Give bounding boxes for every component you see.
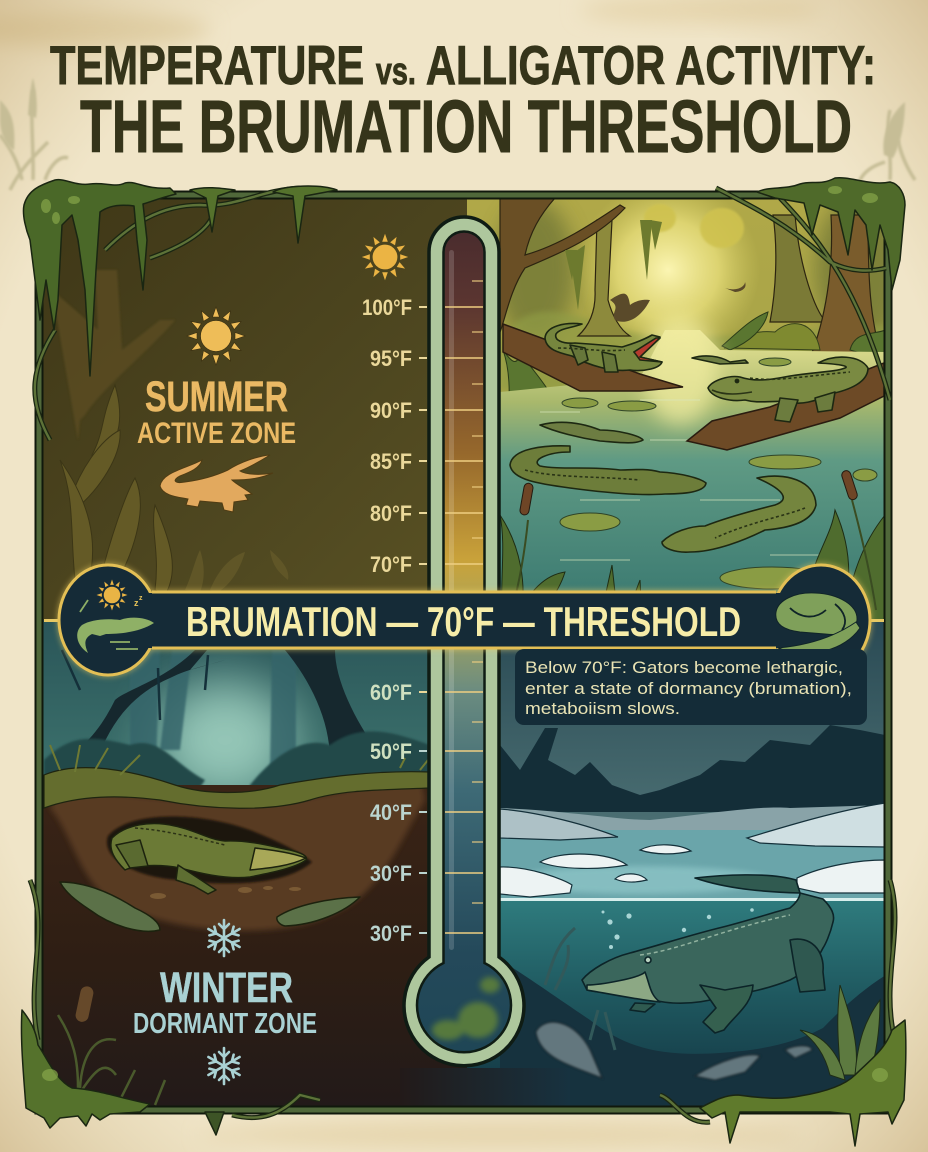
alligator: buried left bbox=[60, 882, 160, 931]
alligator: open jaw on log bbox=[545, 324, 662, 372]
scale ticks bbox=[445, 281, 483, 933]
moss: bottom right bbox=[700, 1020, 906, 1146]
grass ridge bbox=[44, 768, 430, 808]
snow bank back bbox=[500, 806, 867, 830]
logs bbox=[503, 324, 884, 450]
panel: winter scene right bbox=[400, 620, 887, 1110]
icon: sun with alligator: z bbox=[134, 598, 139, 608]
temperature labels: 40°F bbox=[370, 800, 412, 825]
moss: bottom left bbox=[21, 1010, 150, 1128]
river water bbox=[500, 330, 884, 593]
icon: sun bbox=[187, 307, 245, 365]
panel: winter forest left bbox=[44, 620, 428, 785]
thermometer bbox=[404, 217, 524, 1066]
alligator: long in water bbox=[510, 446, 706, 495]
temperature labels: 85°F bbox=[370, 449, 412, 474]
cattails bbox=[519, 469, 858, 516]
floor blend beneath thermometer bbox=[430, 1068, 526, 1106]
callout: below 70F: metaboiism slows. bbox=[525, 699, 680, 718]
heading: dormant zone: DORMANT ZONE bbox=[133, 1008, 317, 1040]
heading: active zone: ACTIVE ZONE bbox=[137, 417, 296, 450]
lily pads bbox=[560, 358, 877, 589]
surface water bbox=[500, 830, 886, 900]
banner text: BRUMATION — 70°F — THRESHOLD bbox=[186, 598, 741, 645]
bottom-left reeds bbox=[58, 1015, 165, 1105]
callout: below 70F: enter a state of dormancy (brumation), bbox=[525, 679, 852, 698]
panel: summer left bbox=[42, 198, 467, 623]
icon: sun with alligator bbox=[77, 580, 154, 653]
temperature labels: 30°F bbox=[370, 861, 412, 886]
alligator: burrow main bbox=[111, 823, 306, 894]
panel: burrow soil bbox=[42, 745, 467, 1110]
heading: winter: WINTER bbox=[160, 964, 293, 1012]
icon: snowflake bottom bbox=[206, 1048, 242, 1084]
panel: winter zone labels bbox=[133, 920, 317, 1084]
panel: swamp summer scene bbox=[467, 200, 884, 619]
icon: snowflake top bbox=[206, 920, 242, 956]
title bbox=[50, 34, 876, 168]
alligator: on right log bbox=[708, 357, 868, 422]
temperature labels: 90°F bbox=[370, 398, 412, 423]
icon: orange alligator bbox=[160, 455, 273, 512]
icon: curled alligator bbox=[776, 593, 860, 653]
temperature labels: 80°F bbox=[370, 501, 412, 526]
callout: below 70F bbox=[515, 649, 867, 725]
threshold banner bbox=[44, 563, 884, 677]
sea bed bbox=[500, 968, 884, 1086]
moss: top right bbox=[757, 178, 905, 290]
alligators in burrow bbox=[60, 823, 360, 931]
dark treeline bbox=[500, 725, 885, 812]
scene backdrop bbox=[42, 180, 905, 1110]
temperature labels: 50°F bbox=[370, 739, 412, 764]
rocks bbox=[536, 1022, 812, 1080]
ice floes bbox=[500, 803, 885, 897]
temperature labels: 100°F bbox=[362, 295, 412, 320]
alligator under ice bbox=[582, 875, 834, 1033]
sunlight glow bbox=[584, 200, 750, 336]
alligator: small in water bbox=[540, 422, 643, 443]
icon: sun with alligator: z bbox=[139, 595, 143, 602]
burrow hole bbox=[107, 816, 312, 883]
temperature labels: 70°F bbox=[370, 552, 412, 577]
temperature labels bbox=[362, 234, 427, 946]
callout: below 70F: Below 70°F: Gators become lethargic, bbox=[525, 658, 843, 677]
alligators in swamp bbox=[510, 324, 868, 552]
trees bbox=[500, 198, 882, 358]
moss: top left bbox=[23, 180, 176, 376]
alligator: buried right bbox=[277, 897, 360, 926]
alligator: diagonal in water bbox=[662, 476, 816, 552]
icon: small sun bbox=[362, 234, 408, 280]
temperature labels: 30°F bbox=[370, 921, 412, 946]
panel: summer zone labels bbox=[137, 307, 296, 512]
heading: summer: SUMMER bbox=[145, 373, 288, 421]
temperature labels: 60°F bbox=[370, 680, 412, 705]
temperature labels: 95°F bbox=[370, 346, 412, 371]
bushes bbox=[725, 324, 820, 350]
